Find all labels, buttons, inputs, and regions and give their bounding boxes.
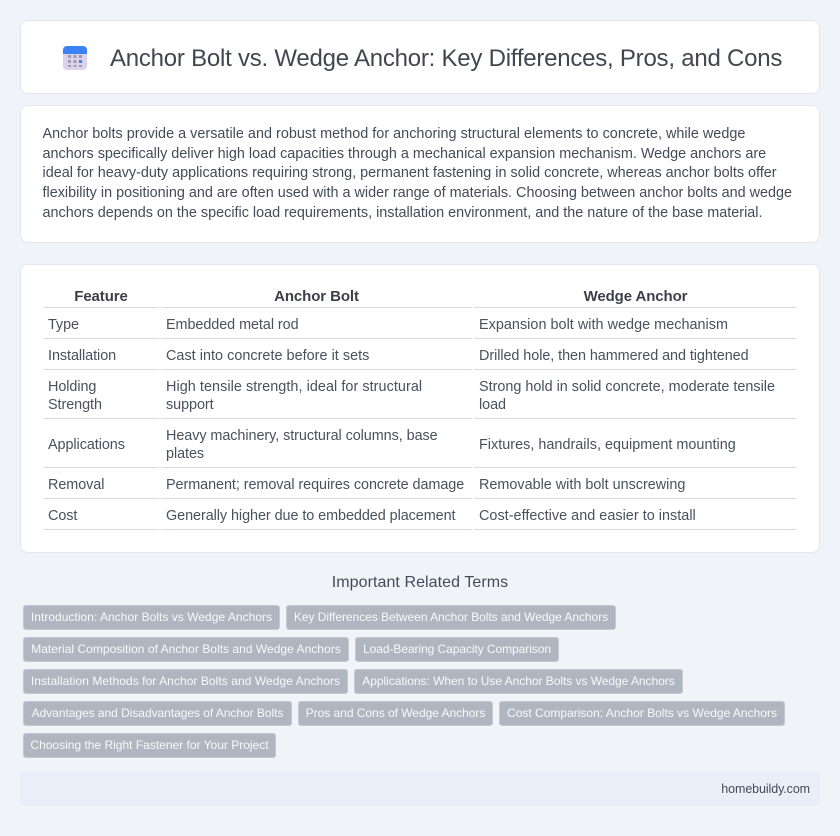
- comparison table: Heavy machinery, structural columns, base: [166, 428, 438, 444]
- related terms tags: Key Differences Between Anchor Bolts and Wedge Anchors: [294, 610, 608, 624]
- related terms tags: Cost Comparison: Anchor Bolts vs Wedge Anchors: [507, 706, 777, 720]
- comparison table: Type: [48, 317, 79, 333]
- intro text card: [20, 105, 820, 243]
- intro paragraph: Anchor bolts provide a versatile and robust method for anchoring structural elements to concrete, while wedge: [42, 126, 745, 142]
- intro paragraph: ideal for heavy-duty applications requiring strong, permanent fastening in solid concrete, whereas anchor bolts offer: [42, 165, 777, 181]
- comparison table: Permanent; removal requires concrete damage: [166, 477, 464, 493]
- related terms tags: Choosing the Right Fastener for Your Project: [30, 738, 269, 752]
- comparison table: Cast into concrete before it sets: [166, 348, 369, 364]
- related terms tags: Material Composition of Anchor Bolts and Wedge Anchors: [31, 642, 341, 656]
- comparison table: Cost-effective and easier to install: [479, 508, 696, 524]
- comparison table: Cost: [48, 508, 77, 524]
- comparison table: Strength: [48, 397, 102, 413]
- footer bar: [20, 772, 820, 806]
- comparison table: support: [166, 397, 214, 413]
- comparison table: Removal: [48, 477, 104, 493]
- comparison table: Drilled hole, then hammered and tightened: [479, 348, 749, 364]
- table card: [20, 264, 820, 553]
- comparison table: Removable with bolt unscrewing: [479, 477, 685, 493]
- comparison table: Expansion bolt with wedge mechanism: [479, 317, 728, 333]
- comparison table: Holding: [48, 379, 96, 395]
- title: Anchor Bolt vs. Wedge Anchor: Key Differences, Pros, and Cons: [110, 45, 782, 72]
- comparison table: Generally higher due to embedded placement: [166, 508, 455, 524]
- comparison table: Feature: [74, 288, 128, 305]
- related terms tags: Pros and Cons of Wedge Anchors: [306, 706, 485, 720]
- comparison table: Strong hold in solid concrete, moderate tensile: [479, 379, 775, 395]
- intro paragraph: [42, 126, 792, 221]
- related terms tags: Load-Bearing Capacity Comparison: [363, 642, 551, 656]
- comparison table: Fixtures, handrails, equipment mounting: [479, 437, 736, 453]
- related terms tags: Applications: When to Use Anchor Bolts vs Wedge Anchors: [362, 674, 675, 688]
- intro paragraph: flexibility in positioning and are often used with a wider range of materials. Choosing between anchor bolts and wedge: [42, 185, 792, 201]
- comparison table: High tensile strength, ideal for structural: [166, 379, 422, 395]
- comparison table: Wedge Anchor: [584, 288, 687, 305]
- icon: calendar: [63, 46, 87, 70]
- intro paragraph: anchors depends on the specific load requirements, installation environment, and the nature of the base material.: [42, 205, 762, 221]
- header card: [20, 20, 820, 94]
- related terms tags: [23, 605, 785, 758]
- related terms tags: Introduction: Anchor Bolts vs Wedge Anchors: [31, 610, 272, 624]
- comparison table: Anchor Bolt: [274, 288, 359, 305]
- comparison table: Embedded metal rod: [166, 317, 299, 333]
- related terms tags: Advantages and Disadvantages of Anchor Bolts: [32, 706, 283, 720]
- comparison table: load: [479, 397, 506, 413]
- comparison table: Installation: [48, 348, 116, 364]
- intro paragraph: anchors specifically deliver high load capacities through a mechanical expansion mechanism. Wedge anchors are: [42, 146, 766, 162]
- related terms heading: Important Related Terms: [332, 574, 508, 591]
- footer source: homebuildy.com: [721, 782, 810, 796]
- related terms tags: Installation Methods for Anchor Bolts and Wedge Anchors: [31, 674, 340, 688]
- comparison table: Applications: [48, 437, 125, 453]
- comparison table: plates: [166, 446, 204, 462]
